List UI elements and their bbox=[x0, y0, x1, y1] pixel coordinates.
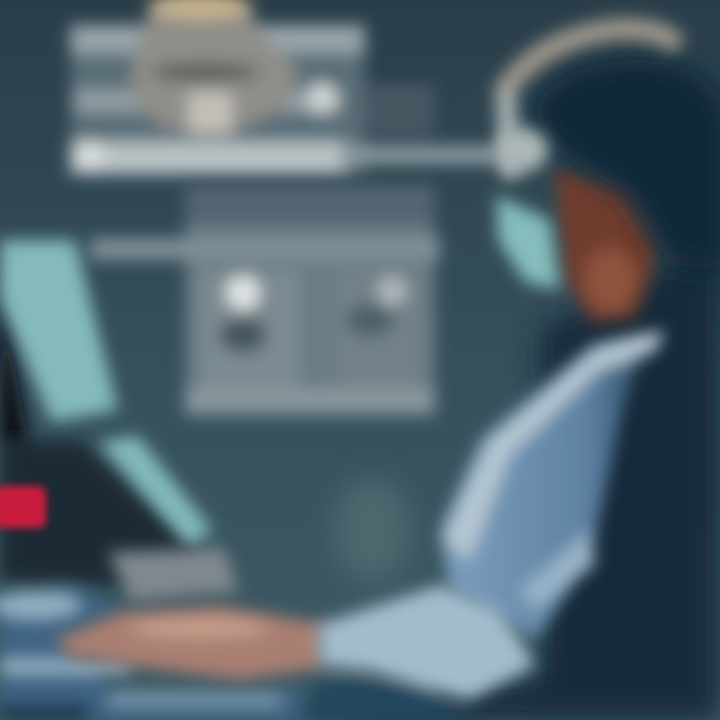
keyboard bbox=[0, 585, 310, 720]
panel rows bbox=[70, 25, 365, 53]
headband bbox=[505, 29, 672, 170]
face mask bbox=[496, 128, 560, 290]
light blue coat bbox=[440, 330, 665, 640]
gray device bbox=[108, 548, 238, 602]
red light bbox=[0, 486, 46, 528]
left gauge bbox=[200, 270, 300, 395]
teal screen panel bbox=[0, 240, 118, 422]
panel backing bbox=[70, 25, 365, 175]
gray chart panel bbox=[90, 185, 440, 415]
right gauge bbox=[335, 270, 420, 395]
dental shape bbox=[130, 10, 298, 130]
person bbox=[300, 29, 720, 720]
faint lower icon bbox=[334, 478, 410, 582]
hair bbox=[530, 60, 720, 270]
face bbox=[555, 165, 660, 322]
body dark coat bbox=[300, 240, 720, 720]
horizontal band bbox=[90, 238, 440, 260]
sleeve bbox=[300, 585, 535, 720]
monitor dark edge bbox=[0, 290, 210, 585]
teal diagonal screen bbox=[98, 436, 212, 548]
hand bbox=[55, 606, 325, 680]
top display panel bbox=[70, 0, 500, 175]
